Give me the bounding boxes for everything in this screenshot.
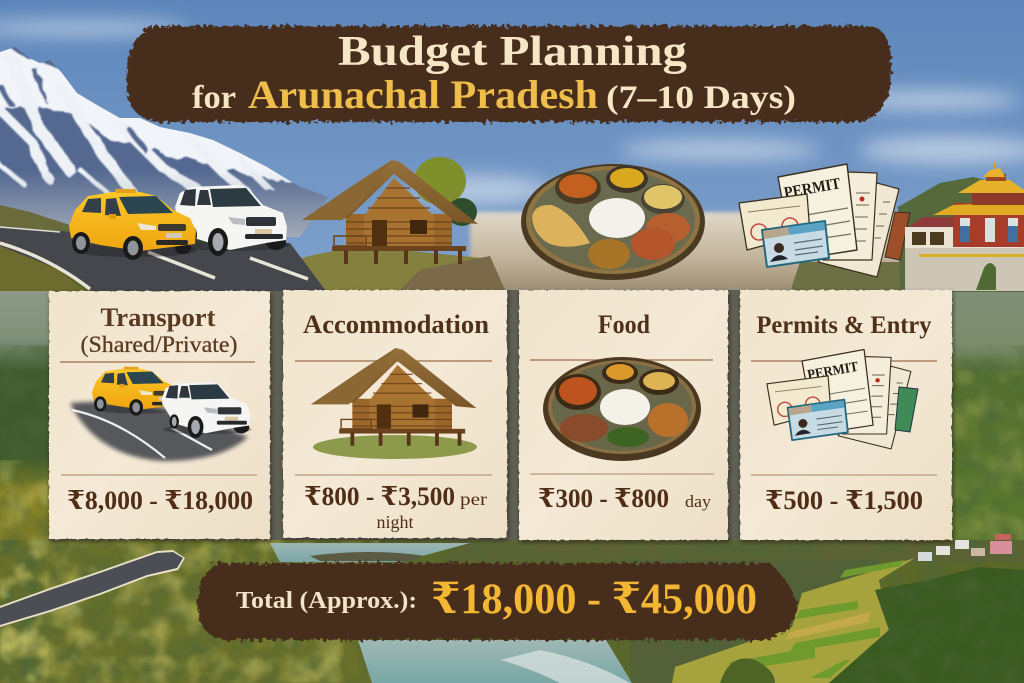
price: ₹300 - ₹800 bbox=[538, 484, 669, 513]
icon: yellow taxi bbox=[69, 189, 197, 260]
title line 2: Arunachal Pradesh bbox=[248, 72, 598, 117]
left foliage band bbox=[0, 205, 70, 232]
mountain range bbox=[0, 40, 340, 240]
mountain road bbox=[0, 550, 185, 627]
icon: hut bbox=[311, 348, 477, 459]
price: day bbox=[685, 492, 712, 511]
total banner bbox=[198, 563, 798, 640]
panel: permits bbox=[740, 290, 952, 540]
panel: transport bbox=[49, 291, 270, 539]
icon: thali bbox=[543, 357, 701, 461]
heading: Food bbox=[598, 310, 650, 339]
hill behind monastery bbox=[898, 177, 1024, 292]
icon: cars on road bbox=[70, 367, 252, 461]
heading: (Shared/Private) bbox=[80, 332, 238, 357]
illustration: wooden hut bbox=[302, 157, 478, 264]
title line 1: Budget Planning bbox=[338, 29, 687, 75]
price: ₹800 - ₹3,500 bbox=[304, 482, 455, 511]
illustration: monastery bbox=[905, 162, 1024, 291]
title line 2: (7–10 Days) bbox=[606, 80, 796, 116]
price bbox=[304, 482, 487, 532]
title line 2 bbox=[192, 72, 796, 117]
total amount: ₹18,000 - ₹45,000 bbox=[431, 576, 757, 623]
title line 2: for bbox=[192, 80, 236, 116]
bottom land bbox=[0, 540, 1024, 683]
side forests bbox=[0, 290, 1024, 560]
heading bbox=[80, 303, 238, 357]
illustration: road and cars bbox=[0, 185, 326, 291]
title banner bbox=[127, 26, 891, 122]
price: per bbox=[460, 489, 487, 509]
heading: Transport bbox=[100, 303, 216, 332]
price: night bbox=[376, 512, 414, 532]
terraced fields bbox=[672, 558, 915, 683]
dark forest lower right bbox=[829, 567, 1024, 683]
icon: permits bbox=[767, 350, 918, 449]
panel: food bbox=[519, 290, 728, 540]
icon: passport booklet bbox=[885, 212, 910, 260]
illustration: thali plate bbox=[521, 164, 705, 280]
heading: Permits & Entry bbox=[756, 312, 932, 339]
sandy mid-ground bbox=[470, 212, 910, 292]
river bbox=[270, 543, 632, 683]
icon: white SUV bbox=[175, 185, 289, 256]
total label: Total (Approx.): bbox=[236, 588, 417, 614]
village bbox=[918, 534, 1012, 561]
price: ₹500 - ₹1,500 bbox=[765, 486, 923, 515]
panel: accommodation bbox=[283, 290, 507, 538]
heading: Accommodation bbox=[303, 310, 490, 339]
illustration: permit papers bbox=[739, 164, 910, 277]
price: ₹8,000 - ₹18,000 bbox=[67, 486, 253, 515]
